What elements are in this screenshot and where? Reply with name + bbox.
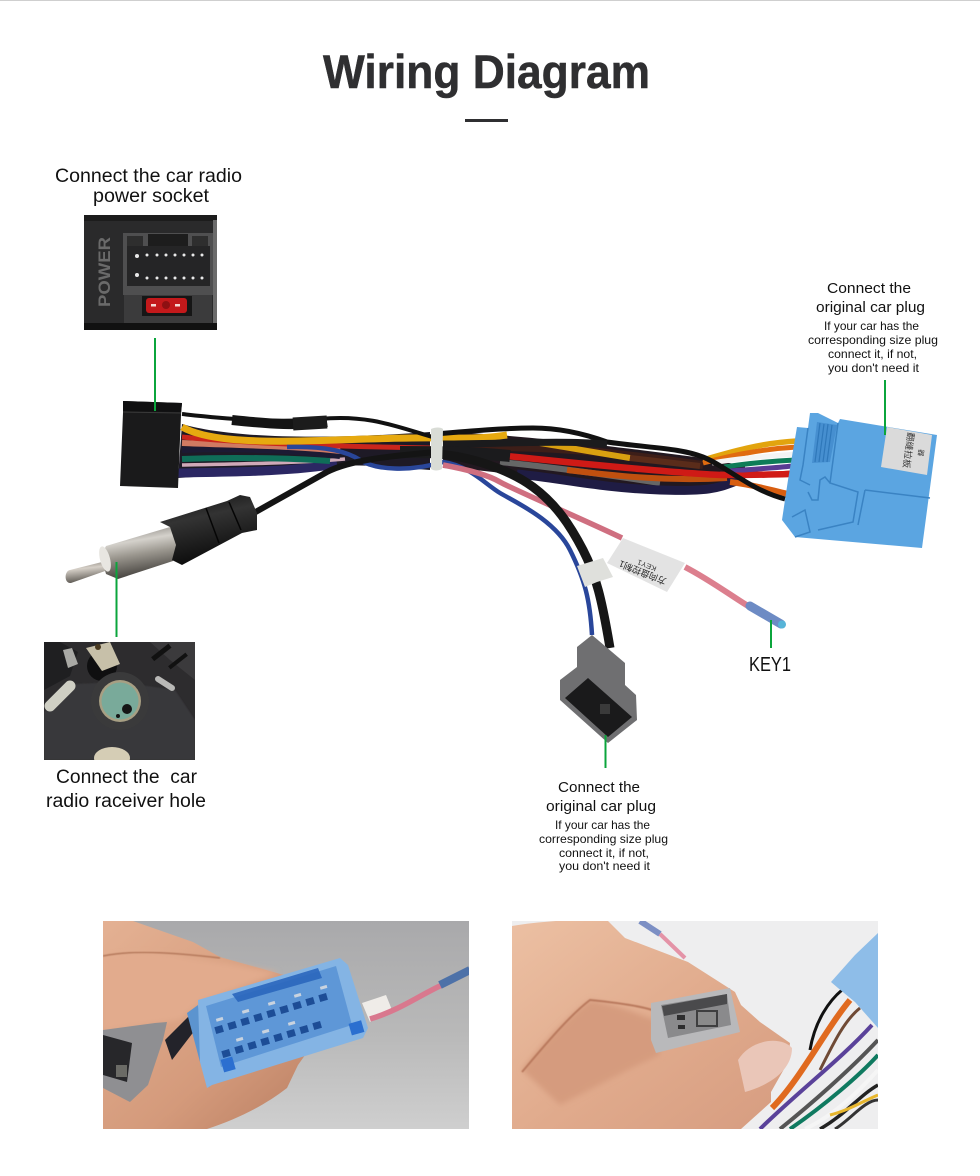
wire harness xyxy=(178,414,797,648)
KEY1 wire label tag: 方向盘控制1 xyxy=(617,558,668,587)
blue wire xyxy=(287,447,592,635)
label: grey plug: Connect the xyxy=(558,779,640,796)
black sleeved wires xyxy=(182,414,785,499)
antenna plug xyxy=(66,495,257,583)
black power connector xyxy=(120,401,182,488)
pink wire to KEY1 xyxy=(443,465,748,606)
pink wire and tag xyxy=(362,970,470,1022)
hand xyxy=(103,921,304,1129)
grey car plug xyxy=(560,635,637,743)
paper label: 器 xyxy=(916,449,925,457)
label: grey plug: corresponding size plug xyxy=(539,832,668,846)
label: blue plug: you don't need it xyxy=(828,361,920,375)
antenna cable xyxy=(252,452,436,514)
embossed POWER text: POWER xyxy=(95,237,114,307)
label: blue plug xyxy=(808,280,938,375)
second cable tie xyxy=(577,558,613,587)
blue connector face xyxy=(187,958,368,1088)
title underline xyxy=(465,119,508,122)
blue car plug xyxy=(782,413,937,548)
green leader lines xyxy=(116,338,885,768)
photo: car radio power socket xyxy=(84,215,217,330)
label: grey plug xyxy=(539,779,668,873)
title: Wiring Diagram xyxy=(323,45,650,98)
KEY1 wire label tag xyxy=(607,538,685,592)
grey plug xyxy=(103,1015,195,1102)
right fan of wires xyxy=(703,441,797,494)
pink wire in background xyxy=(640,921,685,958)
grey plug face xyxy=(651,988,740,1053)
label: power socket xyxy=(55,165,242,207)
left segment wires xyxy=(178,427,507,473)
black power cable xyxy=(436,454,610,648)
label: antenna hole xyxy=(46,767,206,812)
label: blue plug: corresponding size plug xyxy=(808,333,938,347)
rubber boot xyxy=(160,495,257,565)
KEY1 blue tip xyxy=(750,606,786,628)
label: antenna hole: Connect the car xyxy=(56,767,198,788)
label: antenna hole: radio raceiver hole xyxy=(46,791,206,812)
label: power socket: power socket xyxy=(93,185,210,207)
label: blue plug: If your car has the xyxy=(824,319,919,333)
photo: blue plug held in hand xyxy=(103,921,470,1129)
loose coloured wires xyxy=(760,990,878,1129)
fuse xyxy=(146,298,187,313)
paper label xyxy=(881,427,932,475)
label: grey plug: you don't need it xyxy=(559,859,651,873)
label: blue plug: connect it, if not, xyxy=(828,347,917,361)
photo: radio antenna hole xyxy=(44,642,195,769)
pin xyxy=(66,561,108,583)
label: grey plug: If your car has the xyxy=(555,818,650,832)
cable tie xyxy=(431,428,443,470)
hand xyxy=(512,920,792,1129)
metal sleeve xyxy=(101,527,180,579)
middle segment wires xyxy=(457,443,790,490)
label: grey plug: connect it, if not, xyxy=(559,846,649,860)
label: blue plug: Connect the xyxy=(827,280,911,297)
KEY1 wire label tag: KEY1 xyxy=(636,558,658,572)
photo: grey plug held in hand xyxy=(512,920,878,1129)
paper label: 翻缝拉板 xyxy=(901,432,917,469)
label: grey plug: original car plug xyxy=(546,798,656,815)
top rule xyxy=(0,0,980,1)
label: blue plug: original car plug xyxy=(816,299,925,316)
blue connector corner xyxy=(831,933,878,1028)
label: KEY1: KEY1 xyxy=(749,654,791,676)
dark bundle bases xyxy=(178,424,430,478)
label: power socket: Connect the car radio xyxy=(55,165,242,187)
